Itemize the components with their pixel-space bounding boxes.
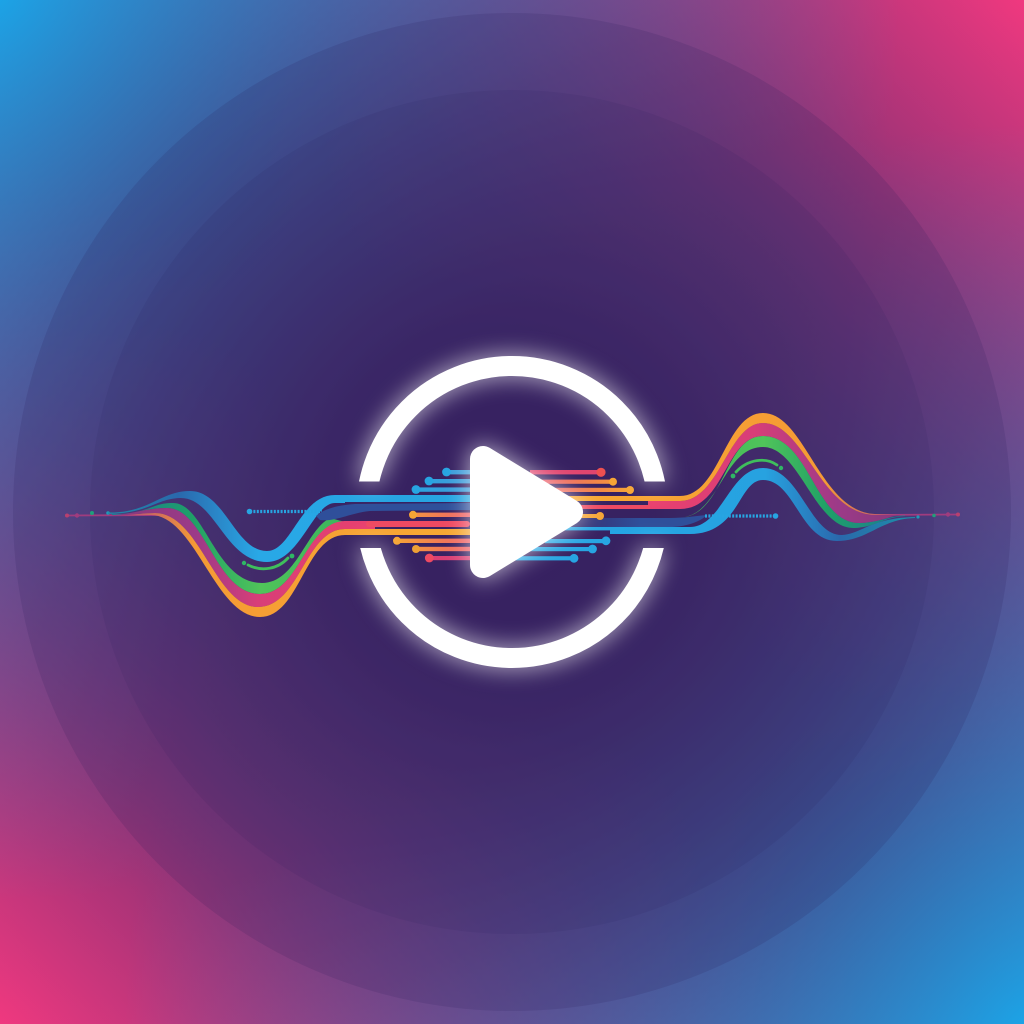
left small green arc <box>242 554 294 569</box>
left orange band <box>120 513 470 617</box>
left connector line 4 <box>409 511 471 519</box>
right blue band <box>610 468 915 541</box>
left connector line 1 <box>442 468 471 476</box>
left sound wave <box>65 491 470 617</box>
play ring glow <box>366 366 658 658</box>
right connector line 3 <box>550 486 634 494</box>
right tail line <box>870 512 960 519</box>
right pink band <box>648 423 900 523</box>
right thin pink line <box>575 505 650 509</box>
right green band <box>685 436 905 528</box>
left connector line 2 <box>425 477 471 485</box>
left connector line 7 <box>425 554 471 562</box>
right orange band <box>545 413 905 515</box>
left tail line <box>65 511 160 518</box>
right dotted line <box>705 513 778 519</box>
left blue band <box>108 491 345 562</box>
right connector line 5 <box>545 536 610 545</box>
left connector line 5 <box>393 537 471 545</box>
right small green arc <box>731 460 783 478</box>
right connector line 7 <box>515 554 578 563</box>
left blue band inner section <box>340 495 470 502</box>
left dark blue band <box>316 503 470 520</box>
left connector line 6 <box>412 545 471 553</box>
left pink band <box>112 508 375 607</box>
right connector line 4 <box>575 512 604 520</box>
right blue band inner section <box>560 527 620 530</box>
left green band <box>112 503 345 594</box>
right connector line 1 <box>530 468 606 477</box>
pink line into play button <box>366 521 470 527</box>
left connector line 3 <box>412 485 471 494</box>
centre connector lines <box>340 468 650 563</box>
inner concentric circle <box>90 90 934 934</box>
left dotted line <box>247 509 322 514</box>
right dark blue band <box>570 515 707 527</box>
right connector line 6 <box>530 545 597 553</box>
right connector line 2 <box>540 478 617 486</box>
play triangle <box>483 459 570 565</box>
play ring <box>366 366 658 658</box>
right sound wave <box>545 413 960 541</box>
